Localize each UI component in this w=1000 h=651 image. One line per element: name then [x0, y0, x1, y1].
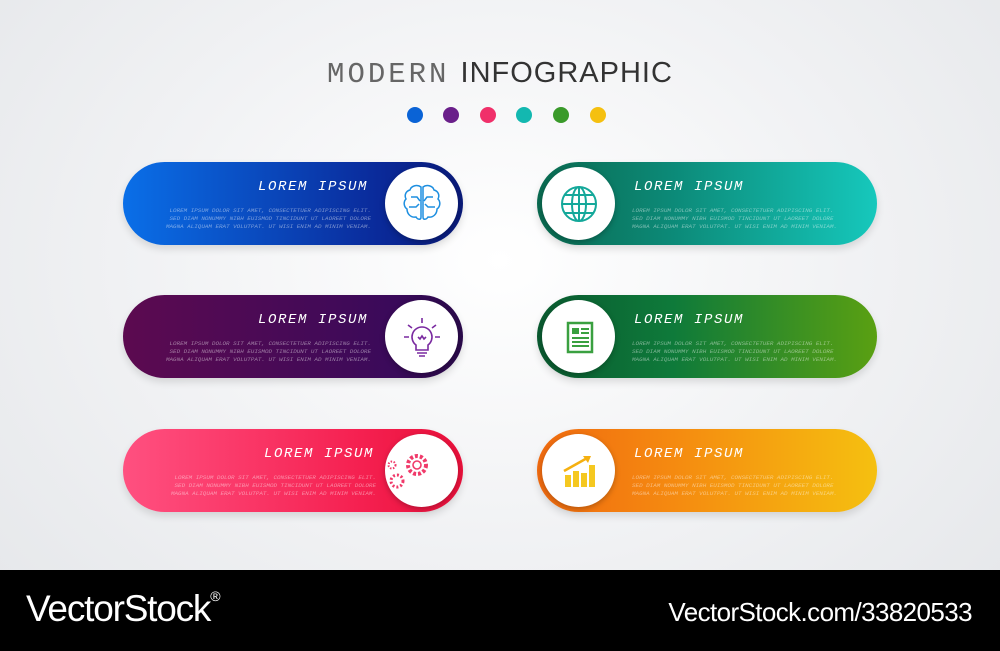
icon: lightbulb — [385, 300, 458, 373]
panel: pink gears: LOREM IPSUM — [264, 446, 374, 462]
panel: green document — [537, 295, 877, 378]
panel: teal globe: MAGNA ALIQUAM ERAT VOLUTPAT. UT WISI ENIM AD MINIM VENIAM. — [632, 223, 837, 230]
footer: VectorStock.com/33820533 — [668, 597, 972, 627]
panel: purple bulb: MAGNA ALIQUAM ERAT VOLUTPAT. UT WISI ENIM AD MINIM VENIAM. — [166, 356, 371, 363]
icon: globe — [542, 167, 615, 240]
panel: teal globe — [537, 162, 877, 245]
title: MODERN INFOGRAPHIC — [327, 57, 673, 91]
panel: teal globe: LOREM IPSUM — [634, 179, 744, 195]
icon: gears — [385, 434, 458, 507]
footer — [0, 570, 1000, 651]
panel: pink gears: SED DIAM NONUMMY NIBH EUISMOD TINCIDUNT UT LAOREET DOLORE — [174, 482, 376, 489]
panel: purple bulb: LOREM IPSUM DOLOR SIT AMET, CONSECTETUER ADIPISCING ELIT. — [170, 340, 371, 347]
panel: orange chart: LOREM IPSUM DOLOR SIT AMET, CONSECTETUER ADIPISCING ELIT. — [632, 474, 834, 481]
panel: blue brain: LOREM IPSUM DOLOR SIT AMET, CONSECTETUER ADIPISCING ELIT. — [170, 207, 371, 214]
footer: VectorStock® — [26, 588, 219, 629]
icon: brain — [385, 167, 458, 240]
panel: green document: MAGNA ALIQUAM ERAT VOLUTPAT. UT WISI ENIM AD MINIM VENIAM. — [632, 356, 837, 363]
panel: green document: LOREM IPSUM DOLOR SIT AMET, CONSECTETUER ADIPISCING ELIT. — [632, 340, 834, 347]
panel: purple bulb — [123, 295, 463, 378]
panel: blue brain — [123, 162, 463, 245]
panel: orange chart — [537, 429, 877, 512]
panel: teal globe: LOREM IPSUM DOLOR SIT AMET, CONSECTETUER ADIPISCING ELIT. — [632, 207, 834, 214]
panel: orange chart: LOREM IPSUM — [634, 446, 744, 462]
panel: green document: SED DIAM NONUMMY NIBH EUISMOD TINCIDUNT UT LAOREET DOLORE — [632, 348, 834, 355]
panel: purple bulb: LOREM IPSUM — [258, 312, 368, 328]
color dots — [407, 107, 606, 123]
panel: teal globe: SED DIAM NONUMMY NIBH EUISMOD TINCIDUNT UT LAOREET DOLORE — [632, 215, 834, 222]
panel: blue brain: LOREM IPSUM — [258, 179, 368, 195]
panel: orange chart: SED DIAM NONUMMY NIBH EUISMOD TINCIDUNT UT LAOREET DOLORE — [632, 482, 834, 489]
panel: blue brain: SED DIAM NONUMMY NIBH EUISMOD TINCIDUNT UT LAOREET DOLORE — [170, 215, 371, 222]
panel: pink gears: LOREM IPSUM DOLOR SIT AMET, CONSECTETUER ADIPISCING ELIT. — [174, 474, 376, 481]
panel: blue brain: MAGNA ALIQUAM ERAT VOLUTPAT. UT WISI ENIM AD MINIM VENIAM. — [166, 223, 371, 230]
panel: pink gears: MAGNA ALIQUAM ERAT VOLUTPAT. UT WISI ENIM AD MINIM VENIAM. — [171, 490, 376, 497]
icon: bar chart — [542, 434, 615, 507]
panel: orange chart: MAGNA ALIQUAM ERAT VOLUTPAT. UT WISI ENIM AD MINIM VENIAM. — [632, 490, 837, 497]
icon: document — [542, 300, 615, 373]
panel: green document: LOREM IPSUM — [634, 312, 744, 328]
panel: purple bulb: SED DIAM NONUMMY NIBH EUISMOD TINCIDUNT UT LAOREET DOLORE — [170, 348, 371, 355]
panel: pink gears — [123, 429, 463, 512]
